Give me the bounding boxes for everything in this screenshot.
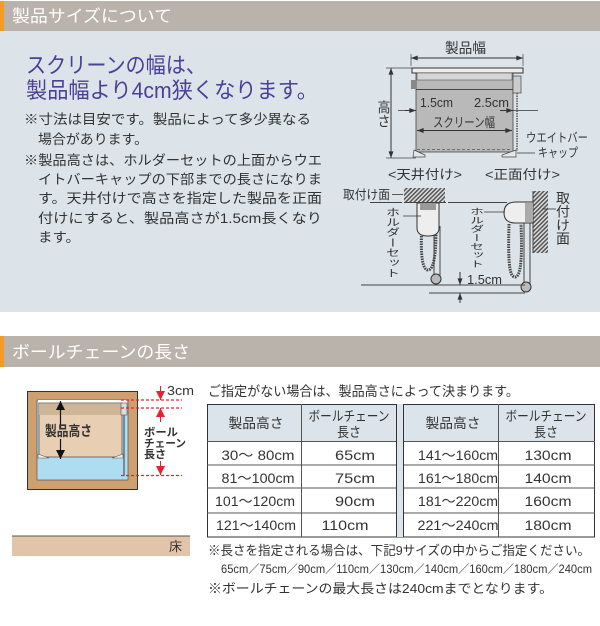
notes text block: ます。 (38, 230, 80, 245)
table: ball chain length by product height: 製品高さ (426, 415, 480, 431)
table: ball chain length by product height: 75cm (335, 471, 375, 486)
diagram: front view of blind with dimensions: 2.5cm (474, 96, 509, 110)
label: ceiling mount: <天井付け> (388, 167, 462, 182)
notes text block: 場合があります。 (38, 132, 148, 147)
table: ball chain length by product height: 製品高さ (228, 415, 284, 431)
table: ball chain length by product height: 30～ 80cm (222, 448, 294, 463)
table intro text: ご指定がない場合は、製品高さによって決まります。 (208, 383, 519, 399)
headline: screen width: スクリーンの幅は、 (26, 53, 206, 78)
diagram: front view of blind with dimensions (376, 40, 588, 160)
table: ball chain length by product height: 110cm (322, 518, 368, 533)
note: specified length sizes: ※ボールチェーンの最大長さは240cmまでとなります。 (208, 581, 553, 596)
diagram: window with blind and chain length: 長さ (144, 448, 166, 461)
table: ball chain length by product height: 長さ (534, 425, 558, 440)
diagram: window with blind and chain length: チェーン (144, 437, 186, 450)
table: ball chain length by product height: 長さ (337, 425, 361, 440)
diagram: front mount holder (448, 191, 571, 292)
diagram: front view of blind with dimensions: キャップ (538, 146, 578, 160)
table: ball chain length by product height: 181～220cm (418, 494, 498, 509)
diagram: ceiling mount holder: ホルダーセット (385, 207, 401, 278)
table: ball chain length by product height: 121～140cm (216, 518, 296, 533)
notes text block: す。天井付けで高さを指定した製品を正面 (38, 190, 322, 206)
diagram: front view of blind with dimensions: 製品幅 (445, 40, 486, 56)
heading: product size (0, 1, 600, 31)
note: specified length sizes (208, 543, 592, 596)
table: ball chain length by product height: ボールチェーン (506, 409, 586, 424)
table: ball chain length by product height: 180cm (524, 518, 572, 533)
diagram: front mount holder: 取付け面 (555, 191, 571, 245)
note: specified length sizes: 65cm／75cm／90cm／110cm／130cm／140cm／160cm／180cm／240cm (221, 563, 592, 576)
table: ball chain length by product height: ボールチェーン (308, 409, 390, 424)
diagram: front view of blind with dimensions: 高さ (376, 99, 390, 128)
heading: ball chain length: ボールチェーンの長さ (12, 343, 190, 362)
heading: ball chain length (0, 336, 600, 367)
panel: product size background (0, 31, 600, 312)
notes text block: ※製品高さは、ホルダーセットの上面からウエ (24, 152, 322, 168)
table: ball chain length by product height: 160cm (524, 494, 572, 509)
heading: product size: 製品サイズについて (12, 7, 172, 26)
notes text block: 付けにすると、製品高さが1.5cm長くなり (38, 210, 322, 226)
notes text block: ※寸法は目安です。製品によって多少異なる (24, 112, 311, 127)
diagram: front view of blind with dimensions: スクリーン幅 (433, 115, 495, 130)
table: ball chain length by product height: 65cm (335, 448, 375, 463)
table: ball chain length by product height: 140cm (524, 471, 572, 486)
diagram: window with blind and chain length: ボール (144, 426, 178, 439)
diagram: front view of blind with dimensions: 1.5cm (420, 96, 453, 110)
floor (12, 536, 190, 556)
table: ball chain length by product height: 130cm (524, 448, 572, 463)
note: specified length sizes: ※長さを指定される場合は、下記9サイズの中からご指定ください。 (208, 543, 590, 558)
table: ball chain length by product height: 81～100cm (222, 471, 294, 486)
notes text block: イトバーキャップの下部までの長さになりま (38, 172, 322, 187)
diagram: ceiling mount holder (343, 188, 446, 284)
diagram: window with blind and chain length: 製品高さ (45, 423, 92, 439)
headline: screen width: 製品幅より4cm狭くなります。 (26, 78, 318, 103)
label: front mount: <正面付け> (485, 167, 560, 182)
table: ball chain length by product height (207, 404, 595, 537)
table: ball chain length by product height: 161～180cm (418, 471, 498, 486)
diagram: ceiling mount holder: 取付け面 (343, 188, 390, 202)
headline: screen width (26, 53, 318, 103)
floor: 床 (169, 539, 182, 554)
table: ball chain length by product height: 221～240cm (418, 518, 498, 533)
table: ball chain length by product height: 101～120cm (215, 494, 295, 509)
diagram: front view of blind with dimensions: ウエイトバー (526, 131, 588, 145)
diagram: window with blind and chain length (28, 384, 194, 490)
diagram: window with blind and chain length: 3cm (167, 384, 194, 398)
diagram: front mount holder: ホルダーセット (469, 207, 485, 268)
table: ball chain length by product height: 90cm (335, 494, 375, 509)
notes text block (24, 112, 322, 245)
dimension: 1.5cm offset: 1.5cm (467, 273, 502, 287)
table: ball chain length by product height: 141～160cm (418, 448, 498, 463)
dimension: 1.5cm offset (361, 272, 525, 303)
